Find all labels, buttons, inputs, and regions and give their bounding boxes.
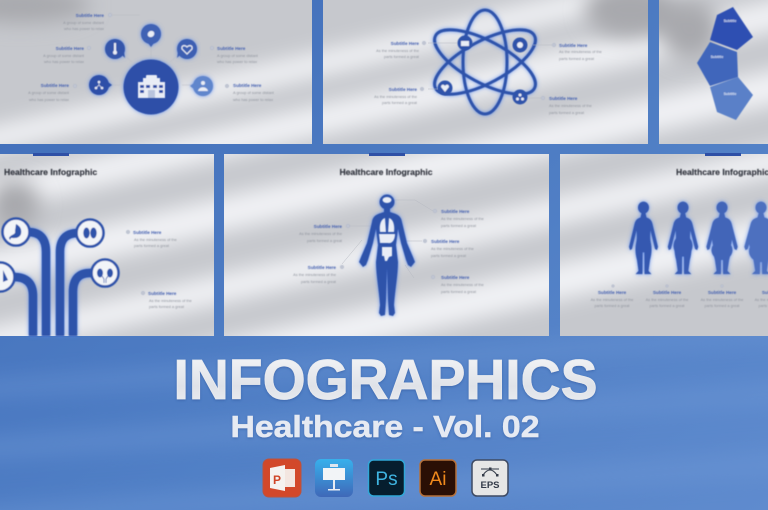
panel: hospital radial infographic	[28, 13, 275, 114]
labels: As the minuteness of the	[431, 246, 474, 251]
labels: Subtitle Here	[233, 83, 262, 88]
panel: pentagon infographic: Subtitle	[711, 55, 723, 59]
labels: Subtitle Here	[148, 291, 177, 296]
labels: who has power to relax	[29, 97, 69, 102]
labels: As the minuteness of the	[376, 48, 419, 53]
doctor pin	[190, 76, 213, 96]
labels: Subtitle Here	[559, 43, 588, 48]
labels: parts formed a great	[149, 304, 185, 309]
labels: Subtitle Here	[431, 239, 460, 244]
panel: body shapes infographic	[591, 167, 768, 308]
labels: Subtitle Here	[598, 290, 627, 295]
bottom background streaks	[0, 320, 768, 510]
labels: parts formed a great	[704, 303, 740, 308]
atom nodes	[438, 36, 528, 104]
labels: who has power to relax	[233, 97, 273, 102]
labels: parts formed a great	[134, 243, 170, 248]
labels	[28, 13, 275, 102]
organs	[379, 197, 395, 261]
labels: As the minuteness of the	[591, 297, 633, 302]
labels	[374, 41, 602, 115]
labels: Subtitle Here	[41, 83, 69, 88]
panel: pentagon infographic: Subtitle	[724, 19, 736, 23]
labels	[591, 285, 768, 308]
labels: As the minuteness of the	[646, 297, 688, 302]
labels: parts formed a great	[441, 223, 477, 228]
icon: stomach	[2, 218, 30, 246]
labels: Subtitle Here	[549, 96, 578, 101]
labels: A group of some distant	[43, 53, 85, 58]
atom orbits	[426, 10, 544, 114]
tab: slide five	[369, 153, 405, 156]
thermometer pin	[105, 39, 125, 59]
labels: As the minuteness of the	[149, 298, 192, 303]
panel: organ tubes infographic	[0, 167, 192, 336]
labels: As the minuteness of the	[441, 282, 484, 287]
labels: parts formed a great	[431, 253, 467, 258]
labels: parts formed a great	[441, 289, 477, 294]
labels: who has power to relax	[217, 59, 257, 64]
tab: slide four	[33, 153, 69, 156]
figure four	[744, 202, 768, 274]
labels: A group of some distant	[217, 53, 259, 58]
labels: A group of some distant	[63, 20, 105, 25]
panel: human body infographic	[293, 167, 484, 316]
labels: parts formed a great	[382, 100, 418, 105]
icon: lungs	[0, 262, 14, 292]
icon: Photoshop: Ps	[375, 469, 398, 490]
labels: Subtitle Here	[708, 290, 737, 295]
heading: Healthcare Infographic	[676, 167, 768, 177]
labels: As the minuteness of the	[374, 94, 417, 99]
labels: who has power to relax	[44, 59, 84, 64]
labels: parts formed a great	[384, 54, 420, 59]
labels	[126, 230, 192, 309]
labels: Subtitle Here	[308, 265, 336, 270]
panel: slide backgrounds with light streaks	[0, 0, 768, 336]
labels: parts formed a great	[594, 303, 630, 308]
labels: As the minuteness of the	[299, 231, 342, 236]
labels	[293, 209, 484, 294]
icon: brain	[76, 220, 104, 246]
molecule pin	[89, 75, 112, 95]
labels: As the minuteness of the	[441, 216, 484, 221]
labels: As the minuteness of the	[134, 237, 177, 242]
labels: As the minuteness of the	[549, 103, 592, 108]
labels: parts formed a great	[649, 303, 685, 308]
icon: EPS: EPS	[480, 480, 500, 491]
icon: Keynote	[315, 459, 353, 497]
panel: pentagon infographic	[697, 7, 753, 120]
labels: A group of some distant	[233, 90, 275, 95]
figure two	[668, 202, 698, 274]
labels: As the minuteness of the	[701, 297, 743, 302]
labels: Subtitle Here	[76, 13, 104, 18]
top pin	[141, 24, 161, 47]
figure one	[629, 202, 658, 274]
labels: Subtitle Here	[56, 46, 84, 51]
icon: Illustrator: Ai	[430, 469, 446, 490]
icon: Illustrator	[420, 460, 456, 496]
icon: PowerPoint	[263, 459, 301, 497]
labels: Subtitle Here	[389, 87, 417, 92]
labels: Subtitle Here	[391, 41, 419, 46]
labels: parts formed a great	[559, 56, 595, 61]
heading: Healthcare Infographic	[339, 167, 433, 177]
labels: who has power to relax	[64, 26, 104, 31]
labels: Subtitle Here	[217, 46, 246, 51]
title: INFOGRAPHICS	[174, 348, 598, 412]
central hospital circle	[124, 60, 178, 114]
icon: Photoshop	[368, 460, 404, 496]
panel: pentagon infographic: Subtitle	[724, 92, 736, 96]
human body silhouette	[359, 194, 415, 316]
labels: Subtitle Here	[441, 275, 470, 280]
labels: Subtitle Here	[314, 224, 342, 229]
panel: atom infographic	[374, 10, 602, 115]
labels: A group of some distant	[28, 90, 70, 95]
labels: As the minuteness of the	[559, 49, 602, 54]
icon: EPS	[472, 460, 508, 496]
labels: parts formed a great	[301, 279, 337, 284]
heart pin	[177, 39, 197, 59]
icon: hospital	[138, 75, 165, 98]
tubes	[0, 232, 105, 336]
figure three	[706, 202, 738, 274]
labels: As the minuteness of the	[293, 272, 336, 277]
labels: Subtitle Here	[441, 209, 470, 214]
labels: parts formed a great	[549, 110, 585, 115]
labels: parts formed a great	[307, 238, 343, 243]
labels: Subtitle Here	[653, 290, 682, 295]
labels: Subtitle Here	[133, 230, 162, 235]
icon: kidneys	[92, 260, 118, 286]
subtitle: Healthcare - Vol. 02	[230, 409, 540, 444]
icon: PowerPoint: P	[273, 473, 281, 487]
heading: Healthcare Infographic	[4, 167, 97, 177]
tab: slide six	[705, 153, 741, 156]
